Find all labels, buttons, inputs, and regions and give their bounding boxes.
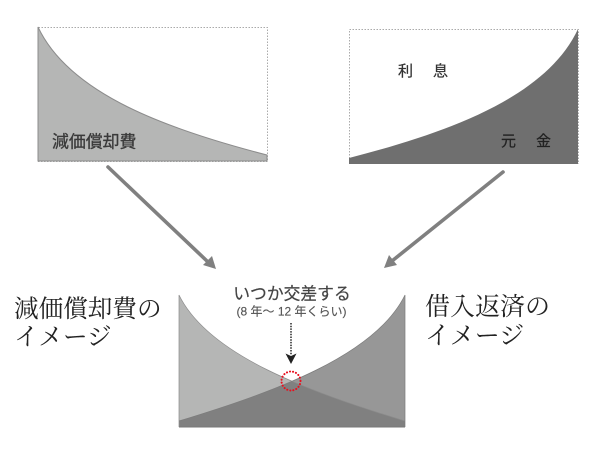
panel: loan repayment curve chart: 金 [536,133,551,150]
heading: depreciation image: 減価償却費の [14,295,162,323]
label: interest: 利 [398,63,413,80]
arrow: dotted pointer to crossover [286,323,296,364]
panel: combined crossover chart [179,295,405,427]
panel: loan repayment curve chart [349,29,578,164]
arrow: depreciation to combined chart [108,167,216,269]
heading: repayment image: イメージ [425,323,524,350]
heading: depreciation image: イメージ [14,324,112,351]
panel: loan repayment curve chart: 息 [433,62,448,80]
label: principal: 元 [501,133,516,150]
heading: repayment image: 借入返済の [425,293,550,321]
arrow: repayment to combined chart [384,172,503,268]
marker: crossover dotted circle [282,372,300,390]
panel: depreciation curve chart [38,27,268,162]
callout: 8 to 12 years: (8 年～ 12 年くらい) [236,304,347,318]
callout: they cross someday: いつか交差する [233,284,351,304]
label: depreciation: 減価償却費 [52,132,136,152]
